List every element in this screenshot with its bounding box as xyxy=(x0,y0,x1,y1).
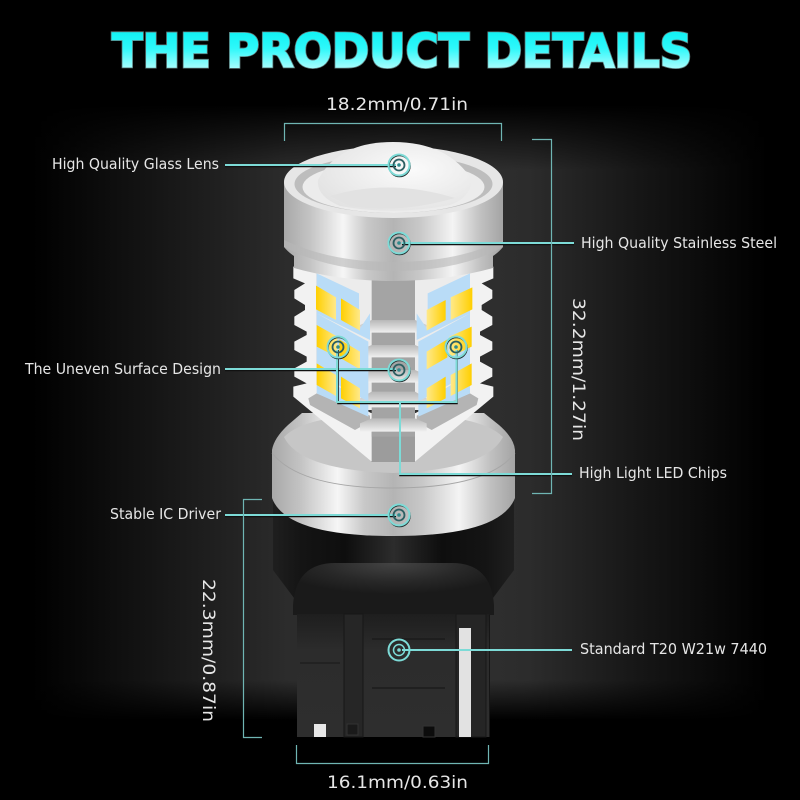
callout: glass lens xyxy=(52,154,410,176)
glass lens xyxy=(294,142,492,213)
dimension: base height xyxy=(198,500,262,738)
callout: LED chips xyxy=(328,336,727,482)
callout: glass lens: High Quality Glass Lens xyxy=(52,155,219,173)
dimension: body height: 32.2mm/1.27in xyxy=(568,298,588,441)
dimension: base width xyxy=(296,745,488,793)
callout: T20 standard xyxy=(388,640,767,660)
callout: stainless steel xyxy=(388,232,777,254)
heat sink body xyxy=(293,263,493,462)
callout: LED chips: High Light LED Chips xyxy=(579,464,727,482)
left fins xyxy=(293,267,372,462)
callout: stainless steel: High Quality Stainless Steel xyxy=(581,234,777,252)
collar xyxy=(272,413,515,536)
title: THE PRODUCT DETAILS xyxy=(112,24,692,78)
dimension: head width xyxy=(284,95,502,141)
bulb illustration xyxy=(272,142,515,737)
dimension: head width: 18.2mm/0.71in xyxy=(326,95,468,115)
callout: T20 standard: Standard T20 W21w 7440 xyxy=(580,640,767,658)
dimension: base height: 22.3mm/0.87in xyxy=(198,579,218,722)
right fins xyxy=(415,267,493,462)
callout: uneven surface xyxy=(24,360,410,382)
callout: IC driver xyxy=(110,504,410,526)
metal head xyxy=(284,146,503,281)
callout: uneven surface: The Uneven Surface Design xyxy=(24,360,221,378)
center column xyxy=(308,263,478,437)
title: THE PRODUCT DETAILS xyxy=(112,24,692,78)
LED strips left xyxy=(316,273,370,417)
body core xyxy=(317,263,470,410)
LED strips right xyxy=(417,273,472,417)
callout: IC driver: Stable IC Driver xyxy=(110,505,222,523)
dimension: base width: 16.1mm/0.63in xyxy=(327,773,468,793)
plug base xyxy=(273,490,514,737)
dimension: body height xyxy=(532,140,588,494)
